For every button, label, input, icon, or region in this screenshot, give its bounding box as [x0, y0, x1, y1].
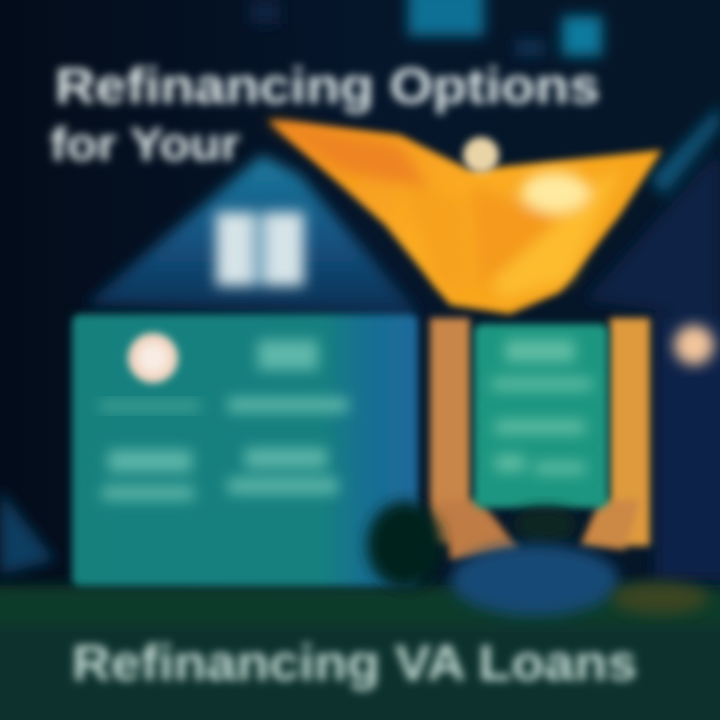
icon: dark shrub: [367, 501, 443, 589]
text block: top right cell: [228, 340, 348, 412]
title: [50, 58, 600, 170]
text block: lower left cell: [102, 450, 194, 500]
bush at lower left: [0, 490, 55, 575]
text block: card content: [492, 340, 592, 474]
decorative blue shapes at the top: [250, 0, 602, 56]
house: blue roof: [85, 155, 420, 315]
subtitle: Refinancing VA Loans: [72, 635, 637, 691]
icon: attic window: [216, 212, 304, 286]
title: Refinancing Options: [55, 58, 600, 114]
icon: right glowing lamp: [674, 325, 714, 365]
icon: coin glow: [463, 137, 499, 173]
panel: large teal grid: [72, 314, 418, 586]
icon: orange funnel: [268, 120, 662, 314]
panel: orange frame with green card: [430, 318, 650, 560]
title: for Your: [50, 118, 240, 170]
icon: blue car mound: [451, 544, 619, 616]
right neighbouring house: [585, 105, 720, 580]
text block: lower right cell: [228, 448, 338, 494]
ground band: [0, 585, 720, 720]
icon: dark doorway shrub: [513, 507, 577, 543]
card: green: [474, 324, 608, 508]
icon: orange shrub: [612, 582, 708, 614]
text block: top left caption: [100, 400, 200, 412]
icon: badge circle: [128, 333, 178, 383]
